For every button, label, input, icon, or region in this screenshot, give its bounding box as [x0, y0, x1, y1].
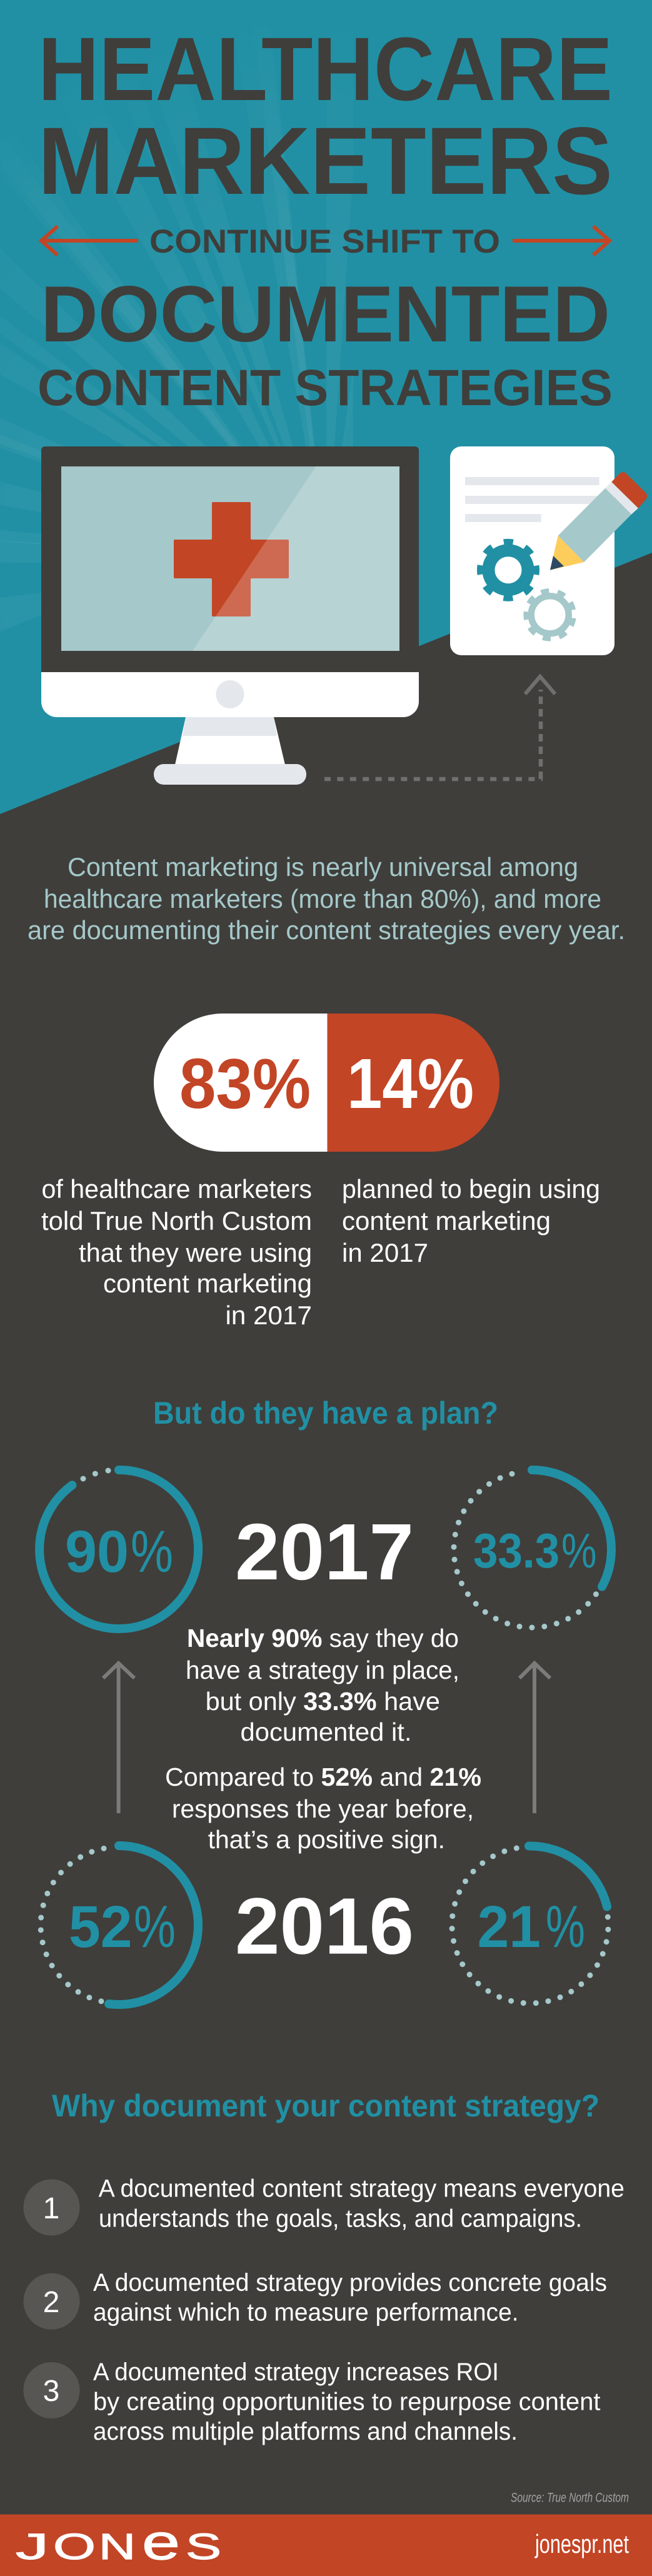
arrow: left [41, 226, 138, 255]
reason 2 [24, 2269, 607, 2330]
arrow: right [513, 226, 609, 255]
intro text [28, 852, 625, 945]
caption: 83% [41, 1174, 312, 1330]
ring: 52% 2016: 52 [69, 1894, 133, 1960]
intro text: healthcare marketers (more than 80%), and more [44, 884, 601, 913]
reason 3 text: across multiple platforms and channels. [93, 2418, 518, 2445]
text: 2016 comparison: Compared to 52% and 21% [165, 1763, 481, 1791]
text: 2017 summary: documented it. [240, 1718, 411, 1746]
caption: 83%: in 2017 [225, 1301, 312, 1330]
caption: 14% [342, 1174, 600, 1267]
caption: 14%: planned to begin using [342, 1174, 600, 1204]
footer bar [0, 2514, 652, 2576]
logo: Jones: S [186, 2527, 221, 2567]
text: 2016 comparison: that’s a positive sign. [208, 1825, 445, 1854]
text: 2016 comparison: responses the year before, [172, 1794, 474, 1823]
reason 3 text: A documented strategy increases ROI [93, 2358, 499, 2386]
ring: 90% 2017: 90 [65, 1519, 129, 1585]
icon: desktop monitor [41, 446, 419, 785]
logo: Jones: O [53, 2527, 96, 2567]
teal header background with rays [0, 0, 652, 875]
pill: 83% and 14% [154, 1014, 499, 1152]
number 1: 1 [43, 2192, 59, 2225]
intro text: Content marketing is nearly universal among [68, 852, 578, 882]
title line: marketers: MARKETERS [38, 108, 613, 214]
reason 2 text: against which to measure performance. [93, 2298, 519, 2326]
stat: 83%: 83% [179, 1044, 311, 1123]
pencil [550, 472, 647, 570]
reason 1 [24, 2175, 624, 2236]
ring: 90% 2017 [39, 1468, 198, 1629]
heading: why document your content strategy: Why document your content strategy? [52, 2088, 599, 2123]
monitor chin [41, 672, 419, 717]
reason 1 text: A documented content strategy means everyone [99, 2175, 624, 2202]
title line: continue shift to: CONTINUE SHIFT TO [149, 223, 500, 260]
monitor bezel [41, 446, 419, 672]
stat: 14%: 14% [347, 1044, 474, 1123]
ring: 52% 2016 [41, 1846, 198, 2005]
year: 2016: 2016 [235, 1882, 414, 1971]
number badge 3 [24, 2362, 80, 2418]
document sheet [450, 446, 614, 655]
ring: 33.3% 2017: % [561, 1523, 596, 1578]
logo: Jones: N [99, 2527, 136, 2567]
number badge 2 [24, 2273, 80, 2330]
caption: 83%: that they were using [79, 1238, 312, 1267]
heading: but do they have a plan: But do they have a plan? [153, 1396, 498, 1431]
pill left half [154, 1014, 328, 1152]
number 2: 2 [43, 2286, 59, 2319]
monitor button [216, 680, 244, 708]
icon: document with gears and pencil [450, 446, 647, 655]
reason 2 text [93, 2269, 607, 2326]
text: 2017 summary: but only 33.3% have [206, 1687, 440, 1716]
reason 3 text [93, 2358, 600, 2445]
ring: 52% 2016: % [134, 1894, 176, 1960]
reason 1 text: understands the goals, tasks, and campaigns. [99, 2205, 582, 2233]
caption: 14%: content marketing [342, 1206, 551, 1235]
caption: 83%: told True North Custom [41, 1206, 312, 1235]
monitor screen [61, 466, 399, 651]
monitor base [154, 764, 306, 785]
arrow: 21% up to 33.3% [519, 1663, 550, 1813]
pill right half [328, 1014, 499, 1152]
text: 2017 summary: Nearly 90% say they do [187, 1624, 459, 1653]
logo: Jones: e [142, 2514, 180, 2570]
number badge 1 [24, 2180, 80, 2236]
ring: 21% 2016 [452, 1846, 608, 2003]
reason 2 text: A documented strategy provides concrete goals [93, 2269, 607, 2297]
reason 3 text: by creating opportunities to repurpose content [93, 2388, 600, 2416]
monitor stand [175, 717, 285, 765]
ring: 90% 2017: % [131, 1519, 173, 1585]
document text lines [465, 477, 599, 522]
gear: teal [480, 542, 536, 598]
caption: 83%: content marketing [103, 1269, 312, 1298]
gear: light [523, 588, 577, 642]
arrow: dotted from monitor to document [324, 677, 555, 779]
ring: 33.3% 2017 [454, 1470, 611, 1628]
intro text: are documenting their content strategies every year. [28, 915, 625, 945]
title line: documented: DOCUMENTED [41, 269, 610, 358]
screen glare [193, 466, 399, 651]
number 3: 3 [43, 2375, 59, 2408]
ring: 21% 2016: 21 [478, 1894, 541, 1960]
caption: 14%: in 2017 [342, 1238, 428, 1267]
title line: healthcare: HEALTHCARE [38, 19, 613, 119]
ring: 21% 2016: % [546, 1894, 585, 1960]
logo: Jones: J [16, 2527, 49, 2567]
reason 1 text [99, 2175, 624, 2233]
text: 2016 comparison [165, 1763, 481, 1854]
text: 2017 summary: have a strategy in place, [186, 1656, 459, 1684]
text: 2017 summary [186, 1624, 459, 1746]
title line: content strategies: CONTENT STRATEGIES [38, 360, 613, 416]
ring: 33.3% 2017: 33.3 [473, 1523, 559, 1578]
arrow: 52% up to 90% [103, 1663, 134, 1813]
reason 3 [24, 2358, 600, 2445]
caption: 83%: of healthcare marketers [41, 1174, 312, 1204]
title [38, 19, 613, 416]
medical cross [174, 502, 289, 616]
year: 2017: 2017 [235, 1507, 414, 1597]
